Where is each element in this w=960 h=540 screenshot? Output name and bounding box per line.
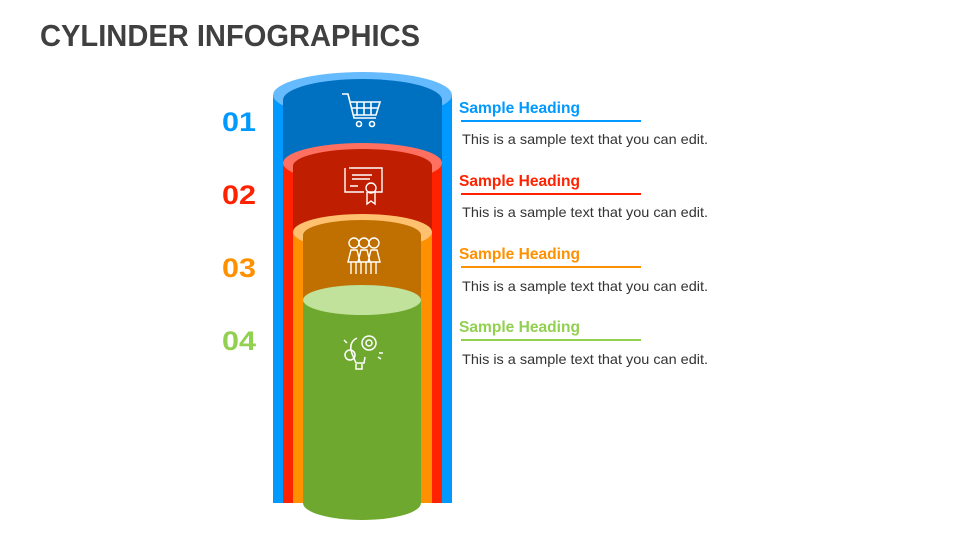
- item 04: This is a sample text that you can edit.: [462, 351, 708, 367]
- layer 1 blue: [273, 72, 452, 503]
- title: CYLINDER INFOGRAPHICS: [40, 18, 420, 53]
- item 03: This is a sample text that you can edit.: [462, 278, 708, 294]
- item 01: 01: [222, 107, 256, 137]
- icon: gears bulb: [344, 336, 383, 369]
- icon: people: [348, 238, 380, 274]
- layer 4 green: [303, 285, 421, 520]
- item 01: Sample Heading: [459, 100, 580, 117]
- item 02: Sample Heading: [459, 173, 580, 190]
- item 04: [222, 319, 708, 367]
- item 01: [222, 100, 708, 147]
- item 03: 03: [222, 253, 256, 283]
- item 01: This is a sample text that you can edit.: [462, 131, 708, 147]
- icon: certificate: [345, 168, 382, 204]
- cylinder graphic: [273, 72, 452, 520]
- layer 3 orange: [293, 214, 432, 503]
- item 04: 04: [222, 326, 256, 356]
- layer 2 red: [283, 143, 442, 503]
- icon: cart: [342, 94, 380, 126]
- item 02: 02: [222, 180, 256, 210]
- item 03: [222, 246, 708, 294]
- item 02: [222, 173, 708, 220]
- item 04: Sample Heading: [459, 319, 580, 336]
- item 02: This is a sample text that you can edit.: [462, 204, 708, 220]
- item 03: Sample Heading: [459, 246, 580, 263]
